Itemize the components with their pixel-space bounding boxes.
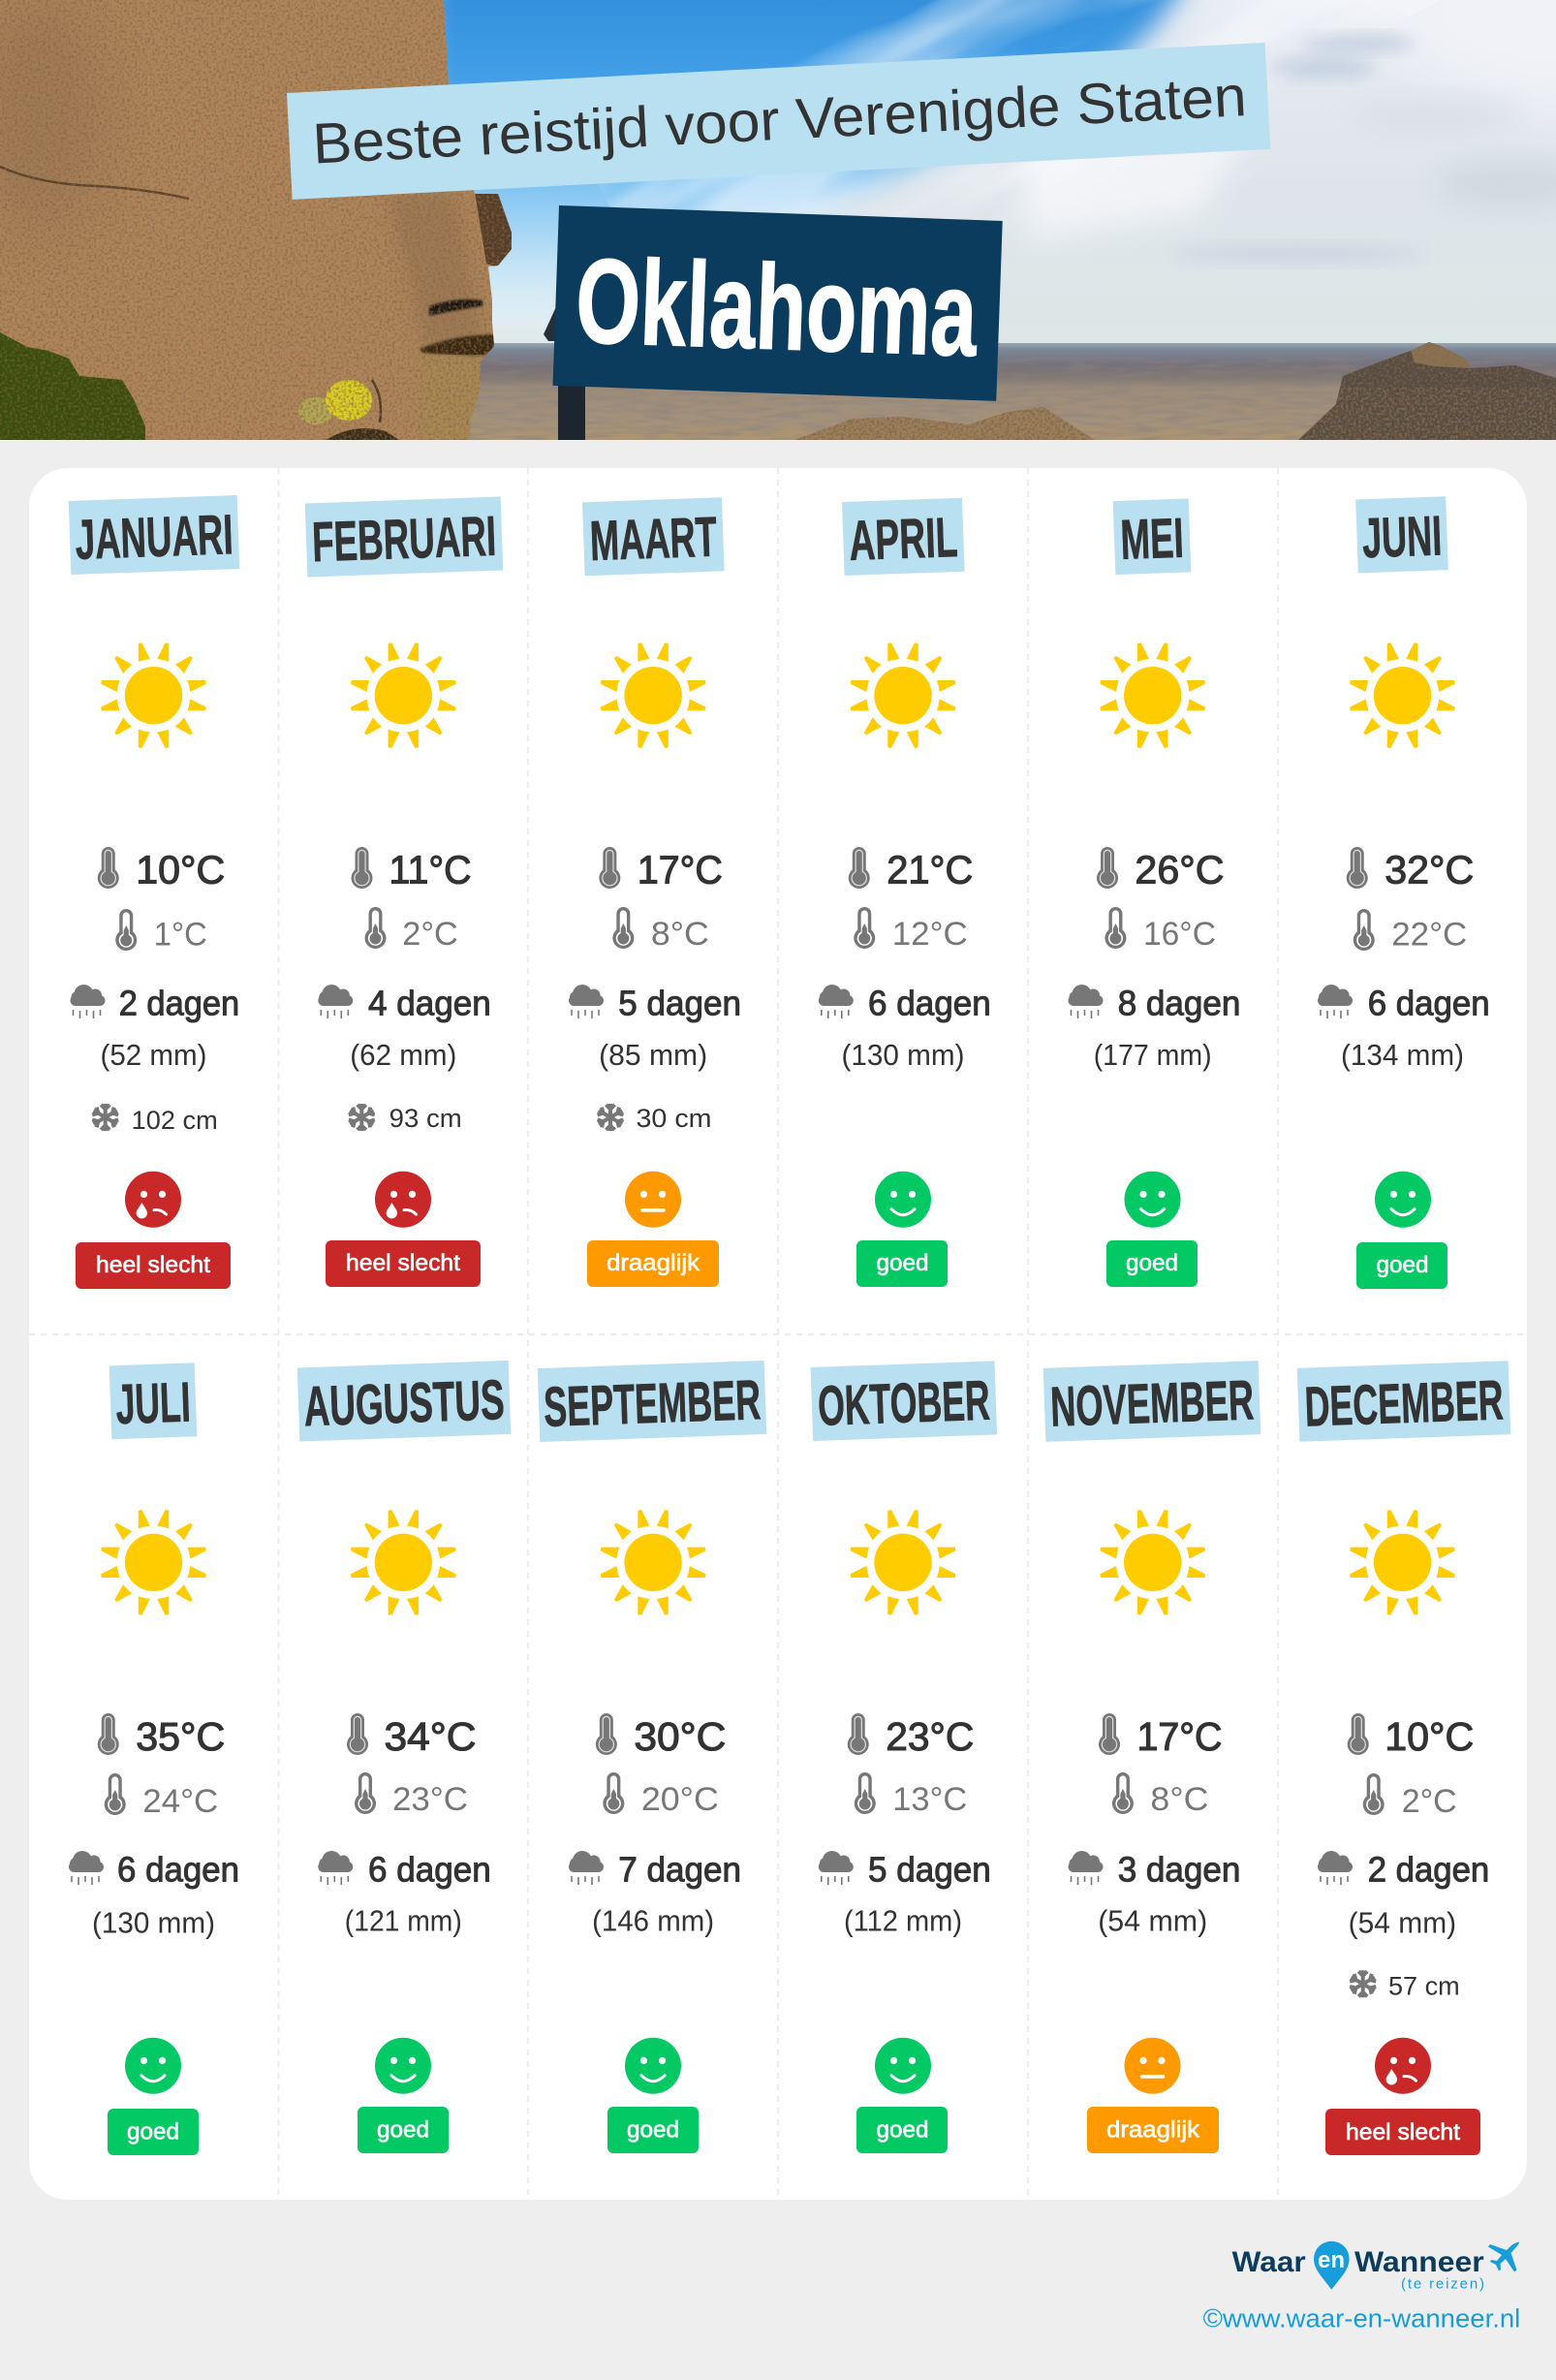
snow: 30 cm xyxy=(636,1104,711,1133)
rating: heel slecht xyxy=(1325,2038,1480,2155)
rain days xyxy=(1068,984,1240,1023)
snow: 57 cm xyxy=(1388,1971,1460,2000)
rain days xyxy=(1068,1850,1240,1890)
low temperature: 20°C xyxy=(641,1781,719,1818)
rain days xyxy=(569,984,741,1023)
low temperature xyxy=(1363,1773,1457,1820)
high temperature xyxy=(596,1713,726,1759)
rainfall: (85 mm) xyxy=(599,1038,707,1072)
month: September xyxy=(538,1361,766,2153)
month: Februari xyxy=(305,496,503,1287)
rating: heel slecht xyxy=(76,1172,231,1289)
high temperature: 17°C xyxy=(638,848,723,892)
snow xyxy=(597,1104,711,1133)
rating: goed xyxy=(856,2038,948,2153)
icon: sun xyxy=(1100,642,1205,748)
icon: map pin xyxy=(1314,2241,1350,2290)
tagline: (te reizen) xyxy=(1401,2276,1484,2293)
rating: goed: goed xyxy=(1376,1252,1428,1278)
rain days xyxy=(569,1850,741,1890)
logo: Waar en Wanneer xyxy=(1232,2241,1519,2293)
low temperature: 8°C xyxy=(651,916,709,953)
rating: goed: goed xyxy=(876,2116,928,2144)
month: November xyxy=(1043,1361,1260,2153)
rating: goed: goed xyxy=(876,1250,928,1276)
high temperature: 10°C xyxy=(1385,1714,1474,1759)
rain days xyxy=(70,984,239,1023)
high temperature: 17°C xyxy=(1136,1714,1222,1759)
snow: 93 cm xyxy=(389,1104,462,1133)
snow xyxy=(91,1104,218,1135)
label: April xyxy=(842,498,965,576)
low temperature xyxy=(612,907,709,953)
rating: goed xyxy=(607,2038,699,2153)
snow xyxy=(1349,1970,1460,2000)
rating: goed xyxy=(1356,1172,1447,1289)
subtitle banner: Beste reistijd voor Verenigde Staten xyxy=(311,64,1248,176)
label: Mei xyxy=(1113,498,1191,575)
low temperature xyxy=(105,1773,218,1820)
hero photo: rock and landscape xyxy=(0,0,1556,440)
high temperature xyxy=(1099,1713,1222,1759)
high temperature xyxy=(98,1713,225,1759)
rain days: 8 dagen xyxy=(1118,984,1240,1023)
high temperature: 30°C xyxy=(634,1714,726,1759)
month: Mei xyxy=(1068,498,1240,1287)
high temperature xyxy=(1347,847,1474,892)
month: Augustus xyxy=(297,1361,511,2153)
low temperature: 23°C xyxy=(392,1781,468,1818)
rainfall: (54 mm) xyxy=(1098,1903,1207,1938)
high temperature: 34°C xyxy=(384,1714,477,1759)
rating: heel slecht xyxy=(326,1172,481,1287)
low temperature xyxy=(855,1772,967,1818)
white calendar panel xyxy=(29,468,1527,2200)
low temperature xyxy=(364,907,458,953)
rating: goed: goed xyxy=(627,2116,679,2144)
icon: sun xyxy=(351,1510,456,1615)
label: November: NOVEMBER xyxy=(1049,1368,1255,1439)
rating: draaglijk: draaglijk xyxy=(607,1250,700,1276)
high temperature: 23°C xyxy=(886,1714,974,1759)
label: Juni: JUNI xyxy=(1361,504,1443,570)
icon: sun xyxy=(1350,642,1455,748)
rain days: 6 dagen xyxy=(368,1850,491,1890)
label: Oktober: OKTOBER xyxy=(817,1369,991,1438)
low temperature: 12°C xyxy=(892,916,968,953)
low temperature: 2°C xyxy=(402,916,458,953)
low temperature: 1°C xyxy=(154,917,207,954)
snow xyxy=(348,1104,462,1133)
rainfall: (62 mm) xyxy=(350,1038,456,1072)
rainfall: (52 mm) xyxy=(101,1038,207,1072)
label: Januari xyxy=(69,495,239,575)
month: Juni xyxy=(1318,496,1490,1289)
low temperature: 24°C xyxy=(142,1783,218,1820)
icon: sun xyxy=(1100,1510,1205,1615)
low temperature: 2°C xyxy=(1402,1783,1457,1820)
rain days: 6 dagen xyxy=(868,984,991,1023)
rainfall: (121 mm) xyxy=(345,1903,462,1938)
icon: sun xyxy=(601,642,705,748)
rainfall: (134 mm) xyxy=(1341,1038,1464,1072)
title banner: Oklahoma: Oklahoma xyxy=(574,235,980,382)
rain days xyxy=(69,1850,239,1890)
label: September xyxy=(538,1361,766,1442)
month: Juli xyxy=(69,1362,239,2155)
rainfall: (177 mm) xyxy=(1094,1038,1212,1072)
rating: goed xyxy=(1106,1172,1198,1287)
month: April xyxy=(819,498,991,1287)
low temperature xyxy=(1105,907,1216,953)
high temperature xyxy=(848,1713,974,1759)
label: September: SEPTEMBER xyxy=(543,1368,762,1439)
label: Mei: MEI xyxy=(1119,507,1185,572)
high temperature xyxy=(599,847,723,892)
rating: heel slecht: heel slecht xyxy=(96,1252,210,1278)
label: Juni xyxy=(1355,496,1448,573)
label: Augustus xyxy=(297,1361,511,1441)
label: November xyxy=(1043,1361,1260,1442)
high temperature xyxy=(98,847,225,892)
rating: draaglijk xyxy=(1087,2038,1219,2153)
high temperature xyxy=(1348,1713,1474,1759)
low temperature: 13°C xyxy=(892,1781,967,1818)
rain days: 6 dagen xyxy=(117,1850,239,1890)
rain days: 4 dagen xyxy=(368,984,491,1023)
high temperature: 10°C xyxy=(136,848,225,892)
rain days: 6 dagen xyxy=(1368,984,1490,1023)
rating: goed: goed xyxy=(377,2116,429,2144)
label: Maart: MAART xyxy=(589,506,718,573)
month: Oktober xyxy=(811,1361,997,2153)
pin text: en xyxy=(1318,2247,1345,2273)
low temperature xyxy=(355,1772,468,1818)
low temperature: 8°C xyxy=(1150,1781,1208,1818)
website credit: ©www.waar-en-wanneer.nl xyxy=(1203,2304,1520,2333)
high temperature: 21°C xyxy=(887,848,973,892)
rainfall: (112 mm) xyxy=(844,1903,962,1938)
subtitle banner xyxy=(287,43,1270,200)
rainfall: (130 mm) xyxy=(841,1038,965,1072)
label: Juli xyxy=(109,1362,197,1439)
low temperature: 16°C xyxy=(1143,916,1216,953)
rain days xyxy=(1318,984,1490,1023)
rating: goed: goed xyxy=(127,2118,179,2145)
low temperature xyxy=(603,1772,719,1818)
month: Maart xyxy=(569,497,741,1287)
rain days: 3 dagen xyxy=(1118,1850,1240,1890)
rain days xyxy=(318,984,491,1023)
high temperature xyxy=(351,847,471,892)
rain days xyxy=(318,1850,491,1890)
low temperature xyxy=(1354,909,1467,954)
rating: heel slecht: heel slecht xyxy=(346,1250,460,1276)
high temperature: 11°C xyxy=(389,848,471,892)
rating: goed xyxy=(856,1172,948,1287)
label: April: APRIL xyxy=(848,506,958,573)
high temperature: 26°C xyxy=(1135,848,1224,892)
rainfall: (54 mm) xyxy=(1349,1905,1456,1939)
rating: draaglijk: draaglijk xyxy=(1106,2116,1200,2144)
rain days xyxy=(819,1850,991,1890)
rain days xyxy=(819,984,991,1023)
rating: heel slecht: heel slecht xyxy=(1346,2119,1460,2145)
icon: sun xyxy=(851,1510,955,1615)
high temperature xyxy=(347,1713,477,1759)
low temperature xyxy=(854,907,968,953)
snow: 102 cm xyxy=(132,1106,218,1135)
rain days: 5 dagen xyxy=(618,984,741,1023)
rain days: 2 dagen xyxy=(1368,1850,1489,1890)
label: Februari xyxy=(305,496,503,578)
label: Oktober xyxy=(811,1361,997,1441)
high temperature: 32°C xyxy=(1385,848,1474,892)
label: Januari: JANUARI xyxy=(75,503,234,572)
icon: sun xyxy=(101,642,206,748)
rain days xyxy=(1318,1850,1489,1890)
low temperature xyxy=(1112,1772,1208,1818)
rain days: 5 dagen xyxy=(868,1850,991,1890)
icon: plane xyxy=(1488,2242,1519,2271)
rain days: 2 dagen xyxy=(119,984,239,1023)
label: Maart xyxy=(582,497,725,576)
rating: goed xyxy=(108,2038,199,2155)
high temperature: 35°C xyxy=(136,1714,225,1759)
icon: sun xyxy=(101,1510,206,1615)
month: Januari xyxy=(69,495,239,1289)
month: December xyxy=(1297,1361,1510,2155)
high temperature xyxy=(1097,847,1224,892)
low temperature xyxy=(115,909,207,954)
rating: draaglijk xyxy=(587,1172,719,1287)
logo: Waar en Wanneer: Waar xyxy=(1232,2246,1306,2278)
low temperature: 22°C xyxy=(1391,917,1467,954)
icon: sun xyxy=(601,1510,705,1615)
high temperature xyxy=(849,847,973,892)
icon: sun xyxy=(851,642,955,748)
wordmark: Wanneer xyxy=(1354,2246,1484,2278)
rainfall: (130 mm) xyxy=(92,1905,215,1939)
title banner: Oklahoma xyxy=(553,205,1003,401)
label: Augustus: AUGUSTUS xyxy=(303,1368,506,1438)
rain days: 7 dagen xyxy=(618,1850,741,1890)
icon: sun xyxy=(1350,1510,1455,1615)
rainfall: (146 mm) xyxy=(592,1903,714,1938)
label: Juli: JULI xyxy=(114,1370,192,1436)
rating: goed: goed xyxy=(1126,1250,1178,1276)
label: Februari: FEBRUARI xyxy=(311,505,497,574)
icon: sun xyxy=(351,642,456,748)
rating: goed xyxy=(358,2038,449,2153)
